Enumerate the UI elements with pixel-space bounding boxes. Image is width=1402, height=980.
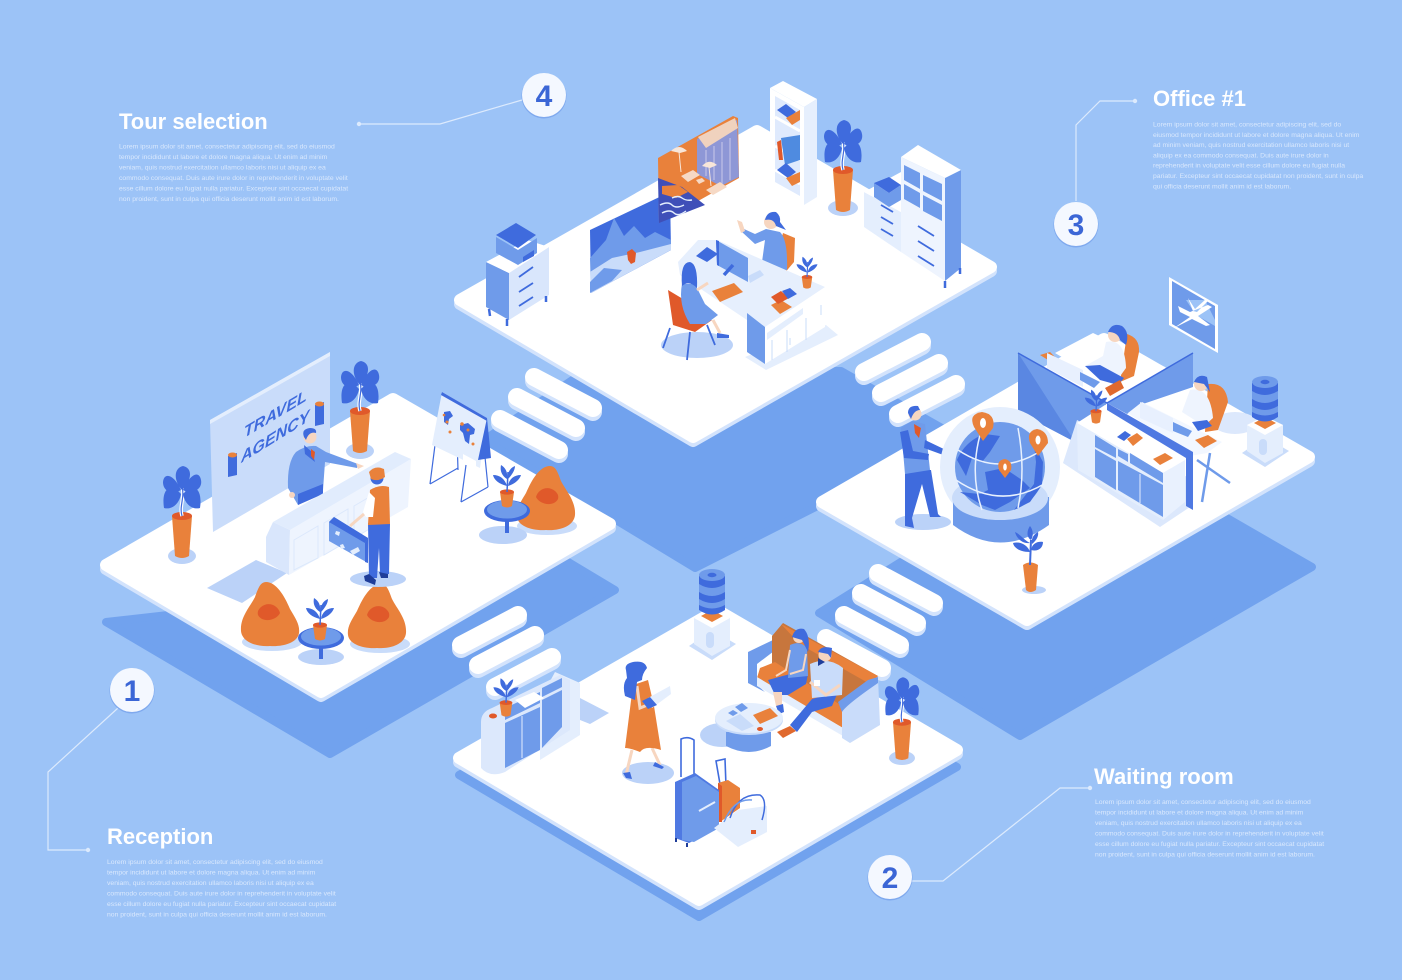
body text: veniam, quis nostrud exercitation ullamco laboris nisi ut aliquip ex ea: [1095, 820, 1302, 827]
customer with suitcase: [329, 468, 406, 587]
bean bag middle: [348, 584, 410, 653]
sign wall: AGENCY: [240, 405, 311, 467]
seated agent: [737, 212, 795, 275]
cabinet with plant: [481, 672, 609, 774]
connector 1: [48, 708, 118, 852]
badge 1: [110, 668, 154, 714]
luggage: [675, 738, 767, 847]
body text: tempor incididunt ut labore et dolore magna aliqua. Ut enim ad minim: [1095, 810, 1304, 816]
body text: commodo consequat. Duis aute irure dolor in reprehenderit in voluptate velit: [119, 175, 348, 182]
side table right: [479, 465, 530, 544]
badge 3: 3: [1068, 209, 1084, 242]
bean bag left: [241, 582, 302, 651]
body text: tempor incididunt ut labore et dolore magna aliqua. Ut enim ad minim: [107, 870, 316, 876]
callout 1: reception: [48, 668, 336, 918]
body text: reprehenderit in voluptate velit esse cillum dolore eu fugiat nulla: [1153, 163, 1345, 170]
body text: eiusmod tempor incididunt ut labore et dolore magna aliqua. Ut enim: [1153, 132, 1360, 139]
callout 2: waiting room: [868, 764, 1324, 900]
body text: veniam, quis nostrud exercitation ullamco laboris nisi ut aliquip ex ea: [119, 164, 326, 172]
storage cabinet with box: [864, 145, 961, 288]
heading: Tour selection: [119, 109, 268, 134]
plant rear: [341, 361, 379, 459]
body text: pariatur. Excepteur sint occaecat cupidatat non proident, sunt in culpa: [1153, 173, 1363, 180]
front desk and agent: [1063, 376, 1257, 527]
body text: non proident, sunt in culpa qui officia deserunt mollit anim id est laborum.: [1095, 852, 1315, 858]
printer on cabinet: [486, 223, 549, 326]
seated customer on orange chair: [661, 262, 733, 360]
connector 4: [357, 100, 522, 126]
water cooler: [689, 569, 736, 660]
body text: qui officia deserunt mollit anim id est laborum.: [1153, 183, 1291, 190]
connector 2: [912, 786, 1092, 881]
partition panels: [1018, 353, 1193, 443]
connector 3: [1076, 99, 1137, 201]
body text: Lorem ipsum dolor sit amet, consectetur adipiscing elit, sed do eiusmod: [1095, 799, 1311, 806]
body text: esse cillum dolore eu fugiat nulla pariatur. Excepteur sint occaecat cupidatat: [1095, 841, 1324, 848]
stairs between reception and tour selection: [500, 377, 593, 454]
callout 4: tour selection: [119, 73, 566, 203]
floor plant: [1013, 526, 1046, 594]
bookshelf: [770, 81, 817, 205]
body text: aliquip ex ea commodo consequat. Duis aute irure dolor in: [1153, 152, 1329, 159]
body text: commodo consequat. Duis aute irure dolor in reprehenderit in voluptate velit: [1095, 830, 1324, 838]
room: reception: [163, 352, 577, 665]
sign wall: [210, 352, 330, 532]
badge 2: [868, 855, 912, 900]
poster: beach: [658, 116, 739, 223]
globe: [940, 407, 1060, 542]
heading: Waiting room: [1094, 764, 1234, 789]
callout 3: office: [1054, 86, 1363, 248]
easel with world map: [430, 392, 491, 502]
coffee table: [700, 703, 783, 752]
floor shadows: [106, 368, 1312, 917]
stairs between tour selection and office: [864, 342, 956, 418]
couple on sofa: [768, 629, 843, 738]
body text: veniam, quis nostrud exercitation ullamco laboris nisi ut aliquip ex ea: [107, 880, 314, 887]
body text: commodo consequat. Duis aute irure dolor in reprehenderit in voluptate velit: [107, 890, 336, 898]
room: office: [895, 277, 1289, 594]
reception counter: [207, 452, 411, 603]
agent beside globe: [895, 406, 956, 530]
water cooler: [1242, 376, 1289, 467]
bean bag right: [517, 466, 577, 535]
badge 4: [522, 73, 566, 118]
plant: [885, 677, 919, 765]
heading: Office #1: [1153, 86, 1246, 111]
woman with laptop: [622, 662, 674, 784]
badge 2: 2: [882, 862, 898, 895]
platform: waiting room floor: [459, 610, 957, 904]
body text: ad minim veniam, quis nostrud exercitation ullamco laboris nisi ut: [1153, 142, 1349, 149]
badge 4: 4: [536, 80, 553, 113]
rear desk and agent: [1040, 325, 1165, 396]
sign wall: TRAVEL: [244, 386, 307, 442]
body text: non proident, sunt in culpa qui officia deserunt mollit anim id est laborum.: [107, 912, 327, 918]
stairs between waiting room and office: [826, 573, 934, 672]
room: waiting room: [481, 569, 919, 847]
stairs between reception and waiting room: [461, 615, 552, 691]
sofa: [748, 623, 880, 743]
receptionist: [288, 428, 364, 505]
plant left: [163, 466, 201, 564]
poster: mountains: [590, 192, 671, 293]
heading: Reception: [107, 824, 213, 849]
room: tour selection: [486, 81, 961, 370]
body text: Lorem ipsum dolor sit amet, consectetur adipiscing elit, sed do: [1153, 122, 1341, 128]
body text: esse cillum dolore eu fugiat nulla pariatur. Excepteur sint occaecat cupidatat: [107, 901, 336, 908]
side table front: [298, 598, 344, 665]
office desk: [678, 240, 838, 370]
body text: non proident, sunt in culpa qui officia deserunt mollit anim id est laborum.: [119, 196, 339, 203]
badge 3: [1054, 202, 1098, 248]
body text: tempor incididunt ut labore et dolore magna aliqua. Ut enim ad minim: [119, 154, 328, 161]
body text: Lorem ipsum dolor sit amet, consectetur adipiscing elit, sed do eiusmod: [119, 144, 335, 150]
platform: reception floor: [106, 399, 610, 696]
plant: [824, 120, 862, 216]
platform: office floor: [822, 339, 1309, 624]
body text: esse cillum dolore eu fugiat nulla pariatur. Excepteur sint occaecat cupidatat: [119, 186, 348, 192]
body text: Lorem ipsum dolor sit amet, consectetur adipiscing elit, sed do eiusmod: [107, 859, 323, 866]
platform: tour selection floor: [460, 131, 991, 441]
badge 1: 1: [124, 675, 140, 708]
wall picture with plane: [1169, 277, 1218, 353]
